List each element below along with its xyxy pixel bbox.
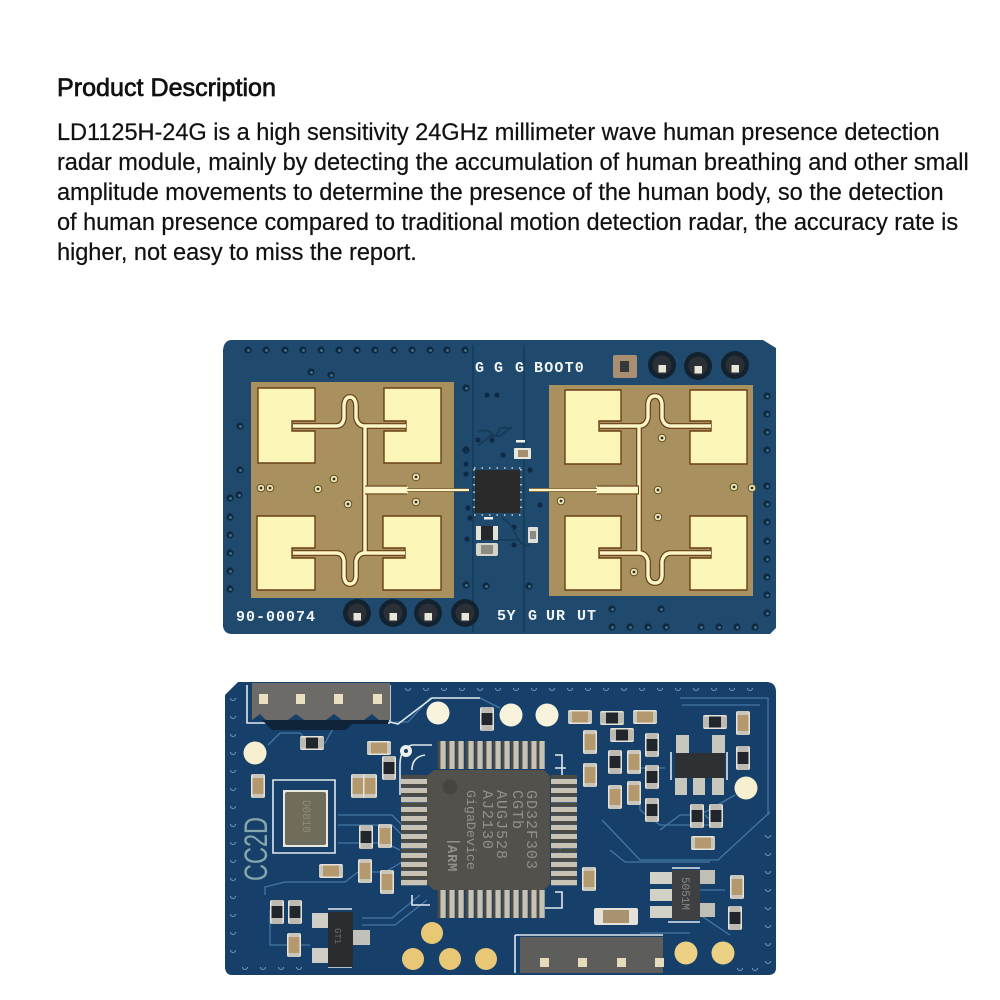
- paragraph: module description: amplitude movements to determine the presence of the human body, so the detection: [57, 180, 944, 206]
- silkscreen labels: G: [494, 360, 503, 377]
- paragraph: module description: of human presence compared to traditional motion detection radar, the accuracy rate is: [57, 210, 958, 236]
- copper pad: left antenna: [251, 382, 454, 598]
- radar chip: [474, 428, 530, 546]
- traces: [265, 698, 770, 945]
- MCU chip: GD32F303: GigaDevice: [463, 790, 478, 870]
- white silk traces: [247, 685, 727, 973]
- paragraph: module description: higher, not easy to miss the report.: [57, 240, 417, 266]
- board: rear PCB: [225, 682, 776, 975]
- crystal: D0810: [299, 800, 311, 833]
- radar module: antenna side: [223, 340, 776, 634]
- vias on copper: [257, 434, 756, 576]
- silkscreen labels: BOOT0: [534, 360, 585, 377]
- MCU chip: GD32F303: GD32F303: [522, 790, 539, 870]
- text block: product description: [57, 74, 969, 266]
- silkscreen labels: G: [515, 360, 524, 377]
- feed network: left: [293, 397, 469, 584]
- silkscreen labels: G: [475, 360, 485, 377]
- regulator: bottom left: GT1: [332, 928, 342, 944]
- regulator: SOT-23-5: [650, 870, 715, 920]
- regulator: SOT-23-6: [675, 735, 725, 795]
- heading: Product Description: Product Description: [57, 74, 276, 102]
- regulator: SOT-23-5: 5051M: [678, 877, 690, 910]
- silkscreen labels: UT: [577, 608, 597, 625]
- MCU chip: GD32F303: CGTb: [508, 790, 525, 830]
- MCU chip: GD32F303: AUGJ528: [492, 790, 509, 860]
- silkscreen labels: 5Y: [497, 608, 516, 625]
- connector holes: [343, 351, 749, 627]
- edge vias: [230, 688, 770, 970]
- radar module: MCU side: [225, 682, 776, 975]
- silkscreen labels: 90-00074: [236, 609, 316, 626]
- MCU chip: GD32F303: AJ2130: [478, 790, 495, 850]
- MCU chip: GD32F303: [427, 770, 550, 890]
- paragraph: module description: [57, 120, 969, 266]
- antenna array: left patches: [257, 388, 441, 590]
- board: front PCB: [223, 340, 776, 634]
- silkscreen labels: G: [528, 608, 537, 625]
- small SMD parts: [476, 440, 538, 556]
- SMD capacitors and resistors: [251, 707, 750, 957]
- regulator: bottom left: [312, 912, 370, 967]
- silkscreen labels: [236, 360, 597, 626]
- test pads: [244, 702, 758, 970]
- MCU pins: [401, 741, 577, 918]
- header: top left: [252, 683, 390, 730]
- silk label: CC2D: CC2D: [238, 817, 274, 881]
- crystal: [283, 790, 328, 847]
- MCU chip: GD32F303: ARM: [443, 845, 459, 872]
- paragraph: module description: radar module, mainly by detecting the accumulation of human breathing and other small: [57, 150, 969, 176]
- paragraph: module description: LD1125H-24G is a high sensitivity 24GHz millimeter wave human presence detection: [57, 120, 940, 146]
- antenna array: right patches: [565, 390, 747, 590]
- board vias: [226, 346, 771, 631]
- silkscreen labels: UR: [546, 608, 566, 625]
- copper pad: right antenna: [549, 385, 753, 596]
- header: bottom right: [520, 937, 664, 973]
- feed network: right: [529, 396, 711, 583]
- square test pad: [613, 355, 637, 378]
